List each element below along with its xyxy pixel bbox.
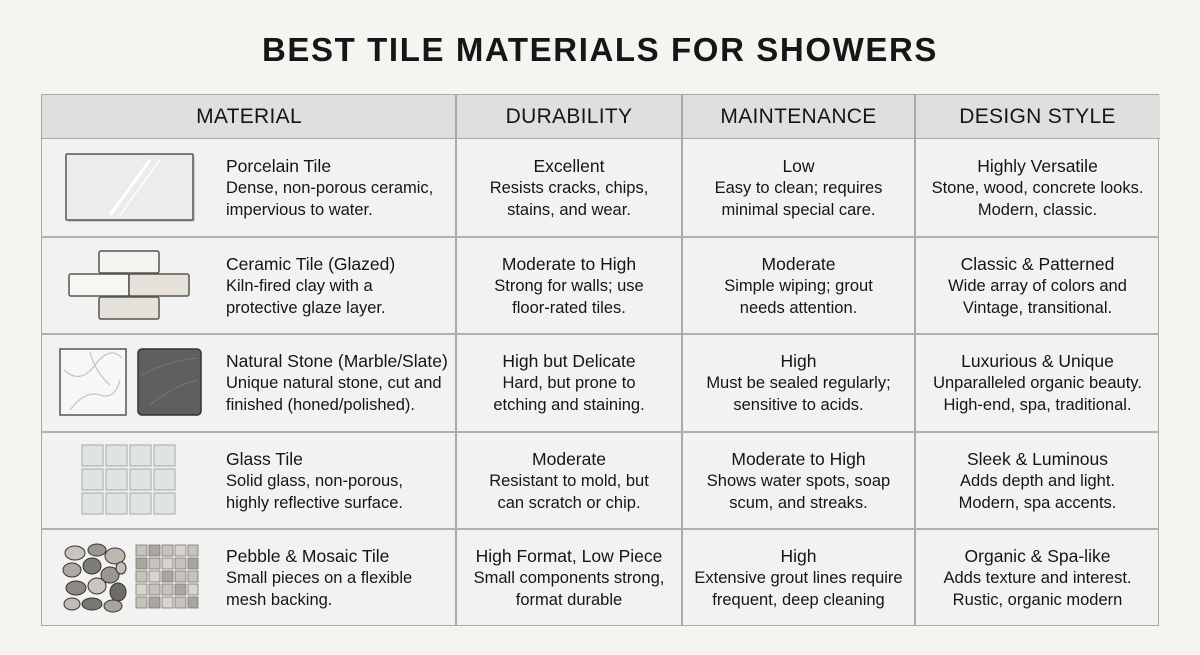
row 5 design: Rustic, organic modern xyxy=(953,590,1122,608)
row 4 design xyxy=(959,448,1116,512)
row 5 durability: High Format, Low Piece xyxy=(476,546,662,566)
row 4 maintenance: Shows water spots, soap xyxy=(707,472,890,490)
icon: marble and slate xyxy=(60,349,201,415)
row 2 maintenance xyxy=(724,254,873,316)
header: material: MATERIAL xyxy=(196,105,302,128)
row 4: glass: Glass Tile xyxy=(226,448,303,468)
icon: porcelain tile xyxy=(66,154,195,222)
row 3: natural stone: finished (honed/polished). xyxy=(226,396,415,414)
row 1 durability: Resists cracks, chips, xyxy=(490,178,648,196)
header: material xyxy=(42,95,456,139)
row 3: natural stone xyxy=(226,350,448,414)
row 5 design xyxy=(943,546,1132,608)
row 3: natural stone: Natural Stone (Marble/Slate) xyxy=(226,350,448,370)
header: design style: DESIGN STYLE xyxy=(959,105,1116,128)
row 3 durability xyxy=(493,350,645,414)
row 1 design xyxy=(932,156,1143,218)
header: maintenance xyxy=(682,95,915,139)
row 1: porcelain xyxy=(226,156,433,218)
row 5 maintenance xyxy=(694,546,903,608)
row 4 durability: can scratch or chip. xyxy=(497,494,641,512)
row 1 design: Modern, classic. xyxy=(978,200,1097,218)
row 4 durability xyxy=(489,448,649,512)
row 5 design: Adds texture and interest. xyxy=(943,568,1132,586)
row 5 design: Organic & Spa-like xyxy=(965,546,1110,566)
row 2: ceramic: Kiln-fired clay with a xyxy=(226,276,373,294)
icon: pebbles xyxy=(63,544,126,612)
row 4 design: Sleek & Luminous xyxy=(967,448,1108,468)
row 3 maintenance: sensitive to acids. xyxy=(733,396,864,414)
header: durability xyxy=(456,95,682,139)
header: design style xyxy=(915,95,1160,139)
row 4 durability: Resistant to mold, but xyxy=(489,472,649,490)
row 1 design: Highly Versatile xyxy=(977,156,1098,176)
icon: glass tiles xyxy=(82,445,175,514)
row 4 design: Modern, spa accents. xyxy=(959,494,1116,512)
row 1 design: Stone, wood, concrete looks. xyxy=(932,178,1143,196)
row 5: pebble: Small pieces on a flexible xyxy=(226,568,412,586)
row 5 durability xyxy=(474,546,664,608)
row 3 maintenance xyxy=(706,350,891,414)
row 3 maintenance: High xyxy=(780,350,816,370)
row 4: glass: highly reflective surface. xyxy=(226,494,403,512)
row 1 maintenance: Easy to clean; requires xyxy=(715,178,882,196)
row 3 design: High-end, spa, traditional. xyxy=(943,396,1132,414)
row 3 design: Unparalleled organic beauty. xyxy=(933,374,1142,392)
row 4 maintenance: scum, and streaks. xyxy=(729,494,868,512)
row 3 durability: High but Delicate xyxy=(502,350,636,370)
row 3 maintenance: Must be sealed regularly; xyxy=(706,374,891,392)
row 5 maintenance: Extensive grout lines require xyxy=(694,568,903,586)
row 1 durability xyxy=(490,156,648,218)
row 2 durability: Strong for walls; use xyxy=(494,276,644,294)
row 3: natural stone: Unique natural stone, cut and xyxy=(226,374,442,392)
row 2 maintenance: needs attention. xyxy=(740,298,857,316)
row 1: porcelain: Dense, non-porous ceramic, xyxy=(226,178,433,196)
row 4 maintenance: Moderate to High xyxy=(731,448,866,468)
row 4: glass xyxy=(226,448,403,512)
row 5: pebble: mesh backing. xyxy=(226,590,332,608)
row 2 durability xyxy=(494,254,644,316)
row 2: ceramic: protective glaze layer. xyxy=(226,298,386,316)
row 2 design xyxy=(948,254,1127,316)
row 3 durability: Hard, but prone to xyxy=(502,374,636,392)
row 2 durability: Moderate to High xyxy=(502,254,636,274)
row 4 maintenance xyxy=(707,448,890,512)
row 2: ceramic: Ceramic Tile (Glazed) xyxy=(226,254,395,274)
row 5 durability: Small components strong, xyxy=(474,568,664,586)
row 3 design: Luxurious & Unique xyxy=(961,350,1114,370)
row 2: ceramic xyxy=(226,254,395,316)
row 1 maintenance: minimal special care. xyxy=(721,200,876,218)
header: durability: DURABILITY xyxy=(506,105,632,128)
table xyxy=(41,94,1159,626)
row 2 durability: floor-rated tiles. xyxy=(512,298,626,316)
row 3 durability: etching and staining. xyxy=(493,396,645,414)
icon: ceramic subway tiles xyxy=(69,251,189,319)
row 1 maintenance: Low xyxy=(782,156,815,176)
header: maintenance: MAINTENANCE xyxy=(720,105,877,128)
row 2 design: Wide array of colors and xyxy=(948,276,1127,294)
row 1: porcelain: impervious to water. xyxy=(226,200,373,218)
row 2 maintenance: Simple wiping; grout xyxy=(724,276,873,294)
row 1 durability: Excellent xyxy=(533,156,604,176)
row 4 design: Adds depth and light. xyxy=(960,472,1115,490)
row 2 maintenance: Moderate xyxy=(762,254,835,274)
row 5 maintenance: frequent, deep cleaning xyxy=(712,590,885,608)
row 4 durability: Moderate xyxy=(532,448,606,468)
title: BEST TILE MATERIALS FOR SHOWERS xyxy=(262,31,938,68)
row 1: porcelain: Porcelain Tile xyxy=(226,156,331,176)
row 5 durability: format durable xyxy=(516,590,622,608)
row 2 design: Classic & Patterned xyxy=(961,254,1114,274)
row 4: glass: Solid glass, non-porous, xyxy=(226,472,403,490)
row 5: pebble xyxy=(226,546,412,608)
row 1 durability: stains, and wear. xyxy=(507,200,631,218)
row 5 maintenance: High xyxy=(780,546,816,566)
row 5: pebble: Pebble & Mosaic Tile xyxy=(226,546,389,566)
icon: mosaic grid xyxy=(136,545,198,608)
row 2 design: Vintage, transitional. xyxy=(963,298,1112,316)
row 3 design xyxy=(933,350,1142,414)
row 1 maintenance xyxy=(715,156,882,218)
